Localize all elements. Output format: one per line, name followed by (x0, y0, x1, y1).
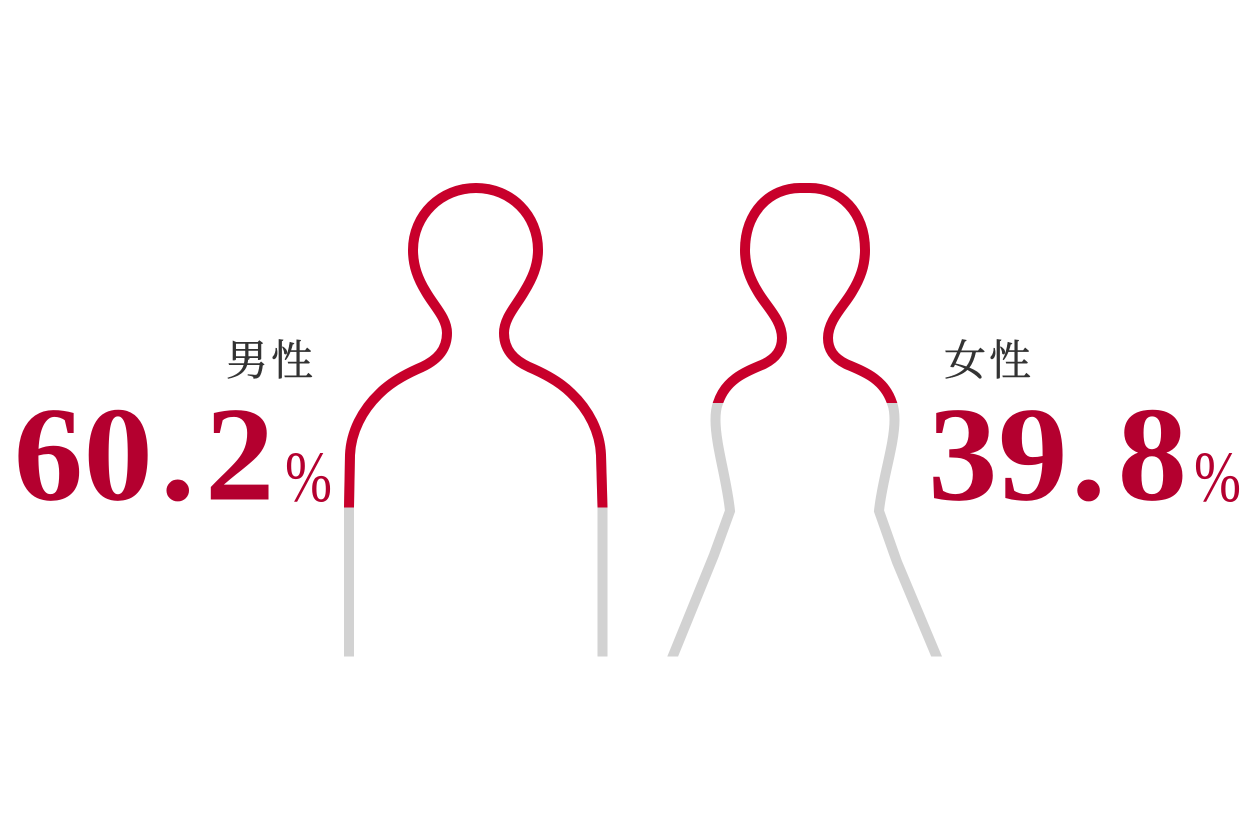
value: female 39.8%: 39.8 (928, 379, 1187, 529)
percent sign: female: % (1194, 437, 1241, 517)
female outline: red 39.8% fill (712, 183, 898, 403)
female figure (668, 188, 941, 667)
infographic: gender ratio (18, 183, 1240, 656)
value: male 60.2%: 60.2 (14, 379, 274, 529)
male figure (349, 188, 602, 670)
male outline: red 60.2% fill (344, 183, 608, 508)
male outline: grey base (349, 188, 602, 670)
label: female: 女性 (944, 339, 1034, 385)
female outline: grey base (668, 188, 941, 667)
label: male: 男性 (226, 339, 316, 385)
percent sign: male: % (285, 437, 332, 517)
